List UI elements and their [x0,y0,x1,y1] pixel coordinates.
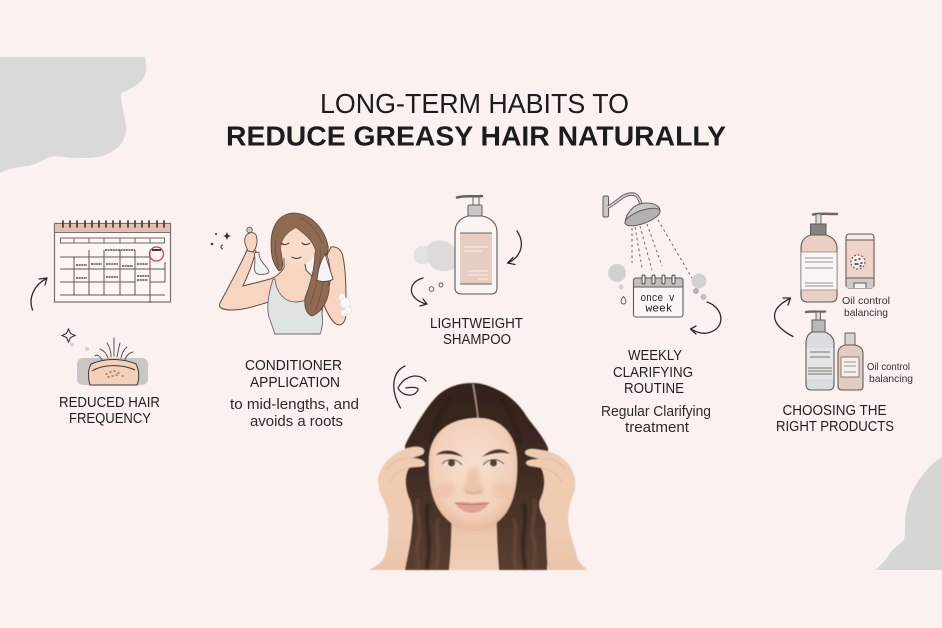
decorative blob: top left [0,57,146,173]
doodle: swirl [394,366,426,408]
heading: weekly clarifying routine [613,348,693,397]
lips [455,502,489,513]
heading: conditioner application: APPLICATION [250,375,340,391]
icon: bottom grey bottle [806,312,834,390]
eyes [442,459,504,467]
panel: weekly clarifying routine [601,194,721,436]
heading: conditioner application [245,358,342,391]
icon: once a week calendar: week [646,304,673,316]
heading: reduced hair frequency [59,395,160,427]
nose [463,468,484,494]
panel: reduced hair frequency [31,221,171,427]
text: conditioner description: to mid-lengths, and [230,397,359,413]
eyebrows [436,449,510,457]
heading: weekly clarifying routine: CLARIFYING [613,365,693,381]
icon: scalp [77,338,148,385]
illustration: woman applying conditioner [220,213,352,334]
arrow: loop [690,302,721,334]
arrow: curved up [775,298,793,336]
heading: lightweight shampoo: LIGHTWEIGHT [430,316,523,332]
left hand [378,447,425,526]
tank top [268,279,323,334]
heading: reduced hair frequency: REDUCED HAIR [59,395,160,411]
icon: once a week calendar: once v [640,293,675,305]
icon: right towel pouch [317,254,333,281]
heading: choosing the right products: RIGHT PRODUCTS [776,419,894,435]
text: conditioner description [230,397,359,430]
icon: top pink bottle [801,214,837,302]
title [226,88,726,152]
heading: lightweight shampoo [430,316,523,348]
panel: choosing the right products [775,214,913,435]
skin: body and arms [220,247,346,334]
heading: conditioner application: CONDITIONER [245,358,342,374]
heading: lightweight shampoo: SHAMPOO [443,332,511,348]
icon: bubbles [608,264,706,300]
heading: weekly clarifying routine: ROUTINE [624,381,684,397]
icon: foam [338,294,352,316]
text: conditioner description: avoids a roots [250,414,343,430]
left hand [245,233,257,252]
face [281,228,315,265]
text: clarifying description [601,404,711,436]
arms and shoulders [370,518,588,570]
heading: reduced hair frequency: FREQUENCY [69,411,151,427]
panel: lightweight shampoo [411,196,523,348]
right hand [525,449,575,524]
label: oil control top: balancing [844,307,888,319]
icon: left towel pouch [254,252,269,274]
icon: small brown bottle [838,333,863,390]
heading: choosing the right products [776,403,894,435]
arrow: right curve [508,231,521,264]
icon: sparkle and dots [62,329,89,351]
icon: water spray [632,220,692,278]
text: clarifying description: Regular Clarifying [601,404,711,420]
icon: shampoo bottle [455,196,497,294]
icon: deodorant stick [846,234,874,288]
text: clarifying description: treatment [625,420,689,436]
label: oil control bottom: Oil control [867,361,910,373]
heading: choosing the right products: CHOOSING THE [782,403,887,419]
title line 1: LONG-TERM HABITS TO [320,88,629,119]
photo: woman with dark hair [370,383,588,570]
hair strands [417,396,535,568]
icon: shower head [603,194,662,229]
label: oil control bottom [867,361,913,385]
hair [271,213,329,316]
arrow: calendar [31,278,47,310]
icon: water drop [621,296,626,304]
label: oil control top: Oil control [842,295,890,307]
hair [405,383,549,570]
icon: once a week calendar [634,275,683,317]
hair part [473,384,478,418]
title line 2: REDUCE GREASY HAIR NATURALLY [226,120,726,152]
neck and chest [449,505,499,570]
decorative blob: bottom right [875,457,942,570]
icon: calendar [54,221,170,303]
icon: sparkles [211,232,231,249]
cheek blush [435,482,512,498]
heading: weekly clarifying routine: WEEKLY [628,348,682,364]
panel: conditioner application [211,213,359,430]
icon: bubbles [429,283,443,291]
icon: grey blobs [414,240,455,271]
face [429,418,517,531]
label: oil control bottom: balancing [869,373,913,385]
label: oil control top [842,295,890,319]
arrow: left curve [411,278,427,306]
